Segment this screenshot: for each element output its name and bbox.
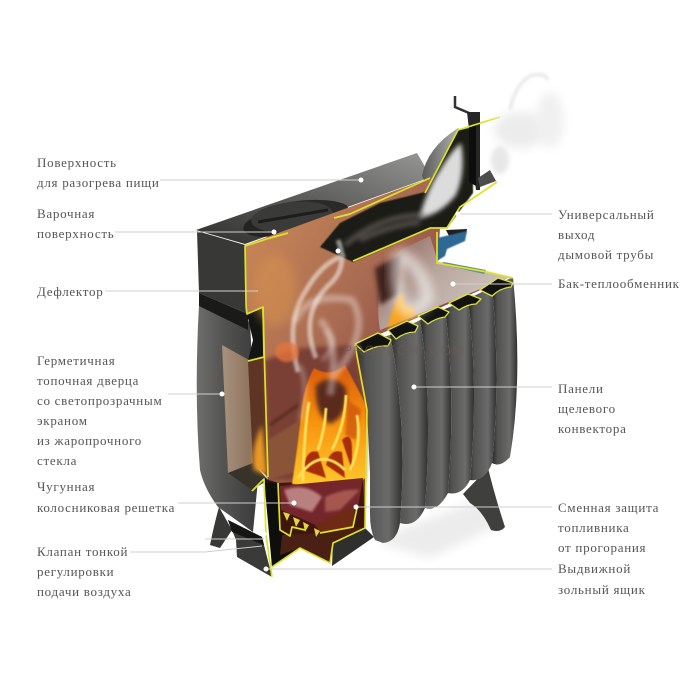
label: cast-iron grate: колосниковая решетка <box>37 500 175 515</box>
left frame black <box>247 307 264 361</box>
label: air valve: подачи воздуха <box>37 584 131 599</box>
left leg <box>210 507 232 548</box>
label: ash drawer: зольный ящик <box>558 582 646 597</box>
label: food heating surface: для разогрева пищи <box>37 175 160 190</box>
burner lid <box>241 198 348 241</box>
rear wall of chamber <box>378 236 510 330</box>
right leg <box>463 468 505 531</box>
label: cast-iron grate: Чугунная <box>37 479 95 494</box>
flue dark gases <box>320 127 473 262</box>
label: sealed door: стекла <box>37 453 77 468</box>
smoke in chamber <box>293 240 428 420</box>
upper left side <box>197 231 248 314</box>
label: convector panels: щелевого <box>558 401 616 416</box>
label: deflector: Дефлектор <box>37 284 103 299</box>
yellow cutaway outline <box>245 117 513 577</box>
damper rods <box>455 96 496 190</box>
door window <box>222 345 253 473</box>
label: firebox protection: от прогорания <box>558 540 646 555</box>
floor shadow <box>378 500 500 558</box>
label: firebox protection: Сменная защита <box>558 500 659 515</box>
grate teeth <box>283 512 320 537</box>
label: ash drawer: Выдвижной <box>558 561 631 576</box>
label: food heating surface: Поверхность <box>37 155 117 170</box>
right fins <box>355 277 517 543</box>
label: air valve: Клапан тонкой <box>37 544 128 559</box>
watermark: PROPECHI.COM <box>343 342 465 358</box>
label: heat exchanger tank: Бак-теплообменник <box>558 276 680 291</box>
chimney pipe body <box>422 128 462 192</box>
fin openings <box>355 278 513 352</box>
main chamber <box>245 178 510 567</box>
label: convector panels: Панели <box>558 381 604 396</box>
label: sealed door: топочная дверца <box>37 373 139 388</box>
orange wall glow <box>253 254 297 326</box>
window seen from inside <box>248 357 268 477</box>
label: sealed door: экраном <box>37 413 88 428</box>
wedge below firebox <box>332 528 374 566</box>
label: sealed door: из жаропрочного <box>37 433 142 448</box>
leader dots <box>220 178 460 572</box>
label: firebox protection: топливника <box>558 520 630 535</box>
label: convector panels: конвектора <box>558 421 627 436</box>
label: flue outlet: выход <box>558 227 595 242</box>
flames <box>264 292 416 490</box>
door body <box>197 305 258 532</box>
dark gap <box>375 255 400 305</box>
firebox floor dark <box>268 478 365 567</box>
label: flue outlet: дымовой трубы <box>558 247 654 262</box>
label: cooking surface: поверхность <box>37 226 114 241</box>
stove illustration <box>196 96 517 577</box>
heat exchanger tank <box>437 229 486 274</box>
watermark <box>275 342 465 362</box>
flue smoke highlight <box>419 143 463 218</box>
label: cooking surface: Варочная <box>37 206 95 221</box>
label: sealed door: Герметичная <box>37 353 115 368</box>
label: sealed door: со светопрозрачным <box>37 393 162 408</box>
top face <box>196 153 431 244</box>
coals <box>280 478 363 532</box>
label: flue outlet: Универсальный <box>558 207 655 222</box>
label: air valve: регулировки <box>37 564 114 579</box>
chimney smoke <box>491 75 564 174</box>
leader lines <box>105 180 552 569</box>
black grate column <box>264 478 300 567</box>
ash drawer <box>228 520 272 577</box>
